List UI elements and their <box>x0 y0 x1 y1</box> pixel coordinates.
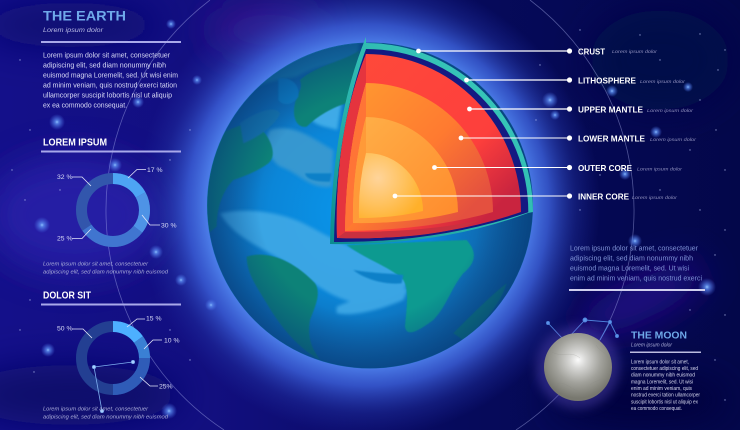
callout: inner core <box>393 192 677 202</box>
donut labels <box>57 167 176 242</box>
body text: consectetuer adipiscing elit, sed <box>631 366 698 372</box>
body text: suscipit lobortis nisl ut aliquip ex <box>631 399 698 405</box>
donut labels: 50 % <box>57 326 72 332</box>
body text: Lorem ipsum dolor sit amet, <box>631 360 689 366</box>
cutaway wedge: earth layers <box>330 37 533 244</box>
callout: inner core: INNER CORE <box>578 192 629 202</box>
callout: lower mantle: LOWER MANTLE <box>578 134 645 144</box>
outer core left face <box>353 117 366 223</box>
callout: outer core: OUTER CORE <box>578 163 632 173</box>
panel: the moon <box>630 330 701 412</box>
text block: right description: adipiscing elit, sed diam nonummy nibh <box>570 256 693 262</box>
constellation <box>92 360 135 413</box>
upper mantle layer <box>337 54 521 238</box>
caption: adipiscing elit, sed diam nonummy nibh euismod <box>43 270 169 276</box>
caption: adipiscing elit, sed diam nonummy nibh euismod <box>43 414 169 420</box>
mantle left face shading <box>337 54 366 238</box>
heading: LOREM IPSUM <box>43 138 107 148</box>
caption <box>43 262 169 276</box>
heading: the earth: THE EARTH <box>43 8 126 24</box>
donut labels: 25% <box>159 384 173 390</box>
lower mantle layer <box>345 83 493 231</box>
caption <box>43 406 169 420</box>
callout: upper mantle: UPPER MANTLE <box>578 104 643 114</box>
body text: ullamcorper suscipit lobortis nisl ut aliquip <box>43 92 172 100</box>
callout: outer core: Lorem ipsum dolor <box>637 166 682 172</box>
donut chart <box>82 178 144 242</box>
donut labels: 10 % <box>164 338 180 344</box>
body text: diam nonummy nibh euismod <box>631 373 695 379</box>
lithosphere layer <box>334 49 528 242</box>
panel: the earth intro <box>41 8 181 110</box>
earth globe <box>200 40 533 368</box>
donut labels: 32 % <box>57 174 72 181</box>
caption: Lorem ipsum dolor sit amet, consectetuer <box>43 262 149 268</box>
body text: enim ad minim veniam, quis <box>631 386 692 392</box>
subheading: Lorem ipsum dolor <box>631 342 672 348</box>
body text: Lorem ipsum dolor sit amet, consectetuer <box>43 52 171 60</box>
continents <box>200 50 507 360</box>
outer core layer <box>353 117 458 223</box>
ocean cloud bands <box>220 40 408 314</box>
body text: nostrud exerci tation ullamcorper <box>631 393 700 399</box>
body text: adipiscing elit, sed diam nonummy nibh <box>43 62 166 70</box>
crust layer <box>330 37 533 244</box>
callout: crust: CRUST <box>578 46 606 56</box>
text block: right description: euismod magna Loremelit, sed. Ut wisi <box>570 266 689 272</box>
moon <box>536 325 620 409</box>
body text: ex ea commodo consequat. <box>43 102 127 110</box>
heading: the moon: THE MOON <box>631 330 687 342</box>
body text: magna Loremelit, sed. Ut wisi <box>631 379 693 385</box>
blue seas in land <box>240 78 403 284</box>
callout: lithosphere: Lorem ipsum dolor <box>640 79 685 85</box>
body text <box>631 360 700 412</box>
callout: upper mantle: Lorem ipsum dolor <box>647 108 693 114</box>
donut labels: 15 % <box>146 316 162 322</box>
donut labels: 30 % <box>161 222 176 230</box>
donut chart <box>82 326 144 390</box>
donut labels: 25 % <box>57 236 72 242</box>
callout: lithosphere: LITHOSPHERE <box>578 76 636 86</box>
donut labels <box>57 316 180 390</box>
callout: outer core <box>432 163 682 173</box>
callout: crust <box>416 46 657 56</box>
subheading: Lorem ipsum dolor <box>43 27 104 34</box>
lower mantle left face <box>345 83 366 231</box>
panel: lorem ipsum chart <box>41 138 181 276</box>
callout: lower mantle: Lorem ipsum dolor <box>650 137 696 143</box>
body text: ea commodo consequat. <box>631 406 682 412</box>
panel: dolor sit chart <box>41 290 181 420</box>
orbit ring <box>106 0 634 430</box>
body text: euismod magna Loremelit, sed. Ut wisi enim <box>43 72 178 80</box>
inner core layer <box>359 153 423 218</box>
callout: lower mantle <box>459 134 696 144</box>
caption: Lorem ipsum dolor sit amet, consectetuer <box>43 406 149 412</box>
mantle floor shading <box>337 220 480 238</box>
callout: crust: Lorem ipsum dolor <box>612 49 657 55</box>
body text <box>43 52 178 110</box>
text block: right description: Lorem ipsum dolor sit amet, consectetuer <box>570 246 699 252</box>
heading: DOLOR SIT <box>43 290 91 302</box>
divider <box>41 41 181 43</box>
text block: right description: enim ad minim veniam, quis nostrud exerci <box>570 276 702 282</box>
callout: inner core: Lorem ipsum dolor <box>632 195 677 201</box>
icon: moon constellation <box>546 318 618 340</box>
donut labels: 17 % <box>147 167 162 174</box>
text block: right description <box>569 246 705 291</box>
body text: ad minim veniam, quis nostrud exerci tation <box>43 82 177 90</box>
callout: lithosphere <box>464 76 685 86</box>
callout: upper mantle <box>467 104 693 114</box>
